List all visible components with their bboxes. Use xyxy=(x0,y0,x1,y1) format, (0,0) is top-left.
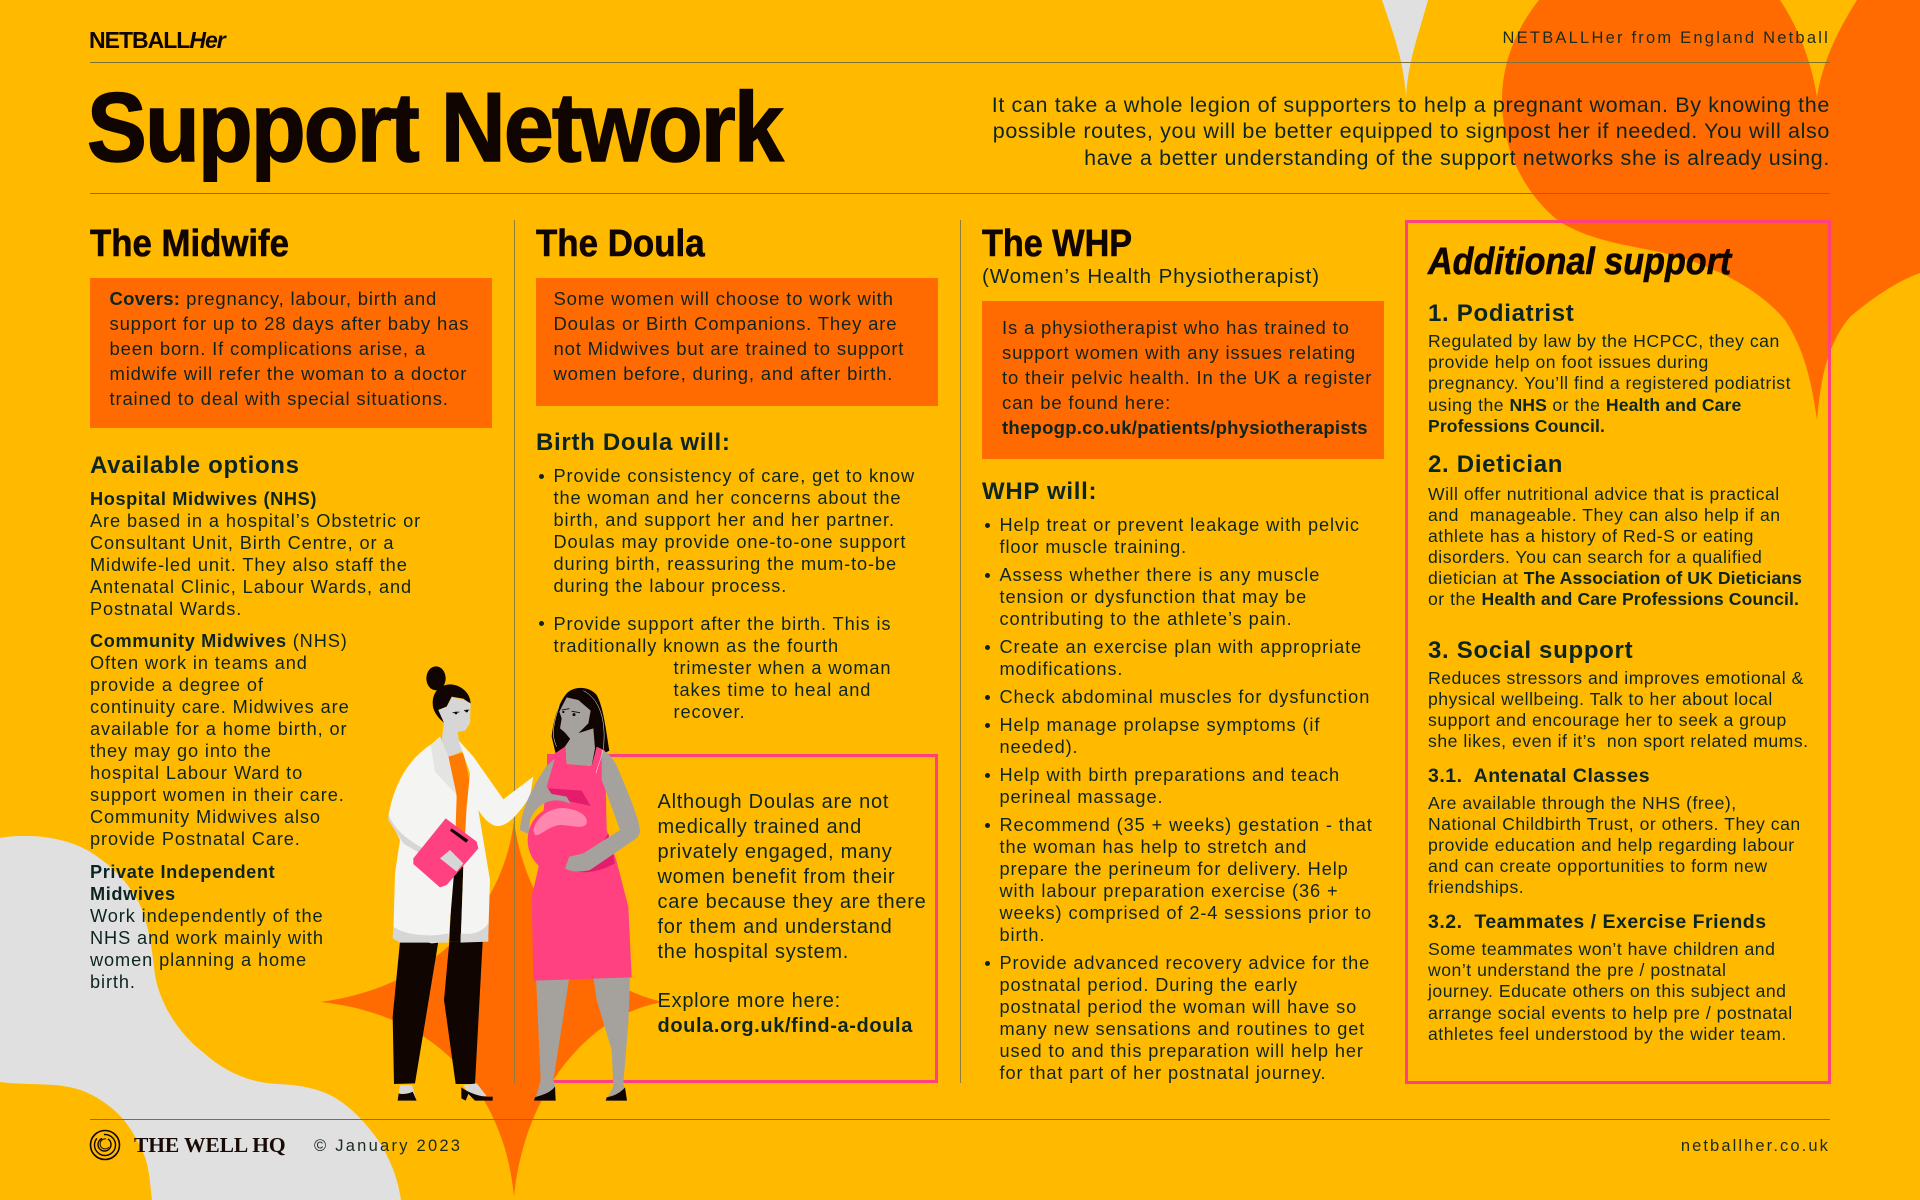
doula callout text: Although Doulas are not xyxy=(658,790,889,812)
WHP bullet list: for that part of her postnatal journey. xyxy=(1000,1063,1326,1083)
heading: the midwife: The Midwife xyxy=(90,223,289,265)
WHP summary text: thepogp.co.uk/patients/physiotherapists xyxy=(1002,416,1368,438)
private independent midwives: Work independently of the xyxy=(90,906,323,926)
podiatrist xyxy=(1428,300,1791,436)
WHP bullet list: postnatal period. During the early xyxy=(1000,975,1298,995)
title: Support Network xyxy=(87,72,782,182)
doula bullet list: traditionally known as the fourth xyxy=(554,636,839,656)
WHP bullet list: with labour preparation exercise (36 + xyxy=(1000,881,1339,901)
antenatal classes heading: 3.1. Antenatal Classes xyxy=(1428,765,1650,787)
heading: the doula: The Doula xyxy=(536,223,705,265)
WHP bullet list: birth. xyxy=(1000,925,1045,945)
WHP bullet list: prepare the perineum for delivery. Help xyxy=(1000,859,1349,879)
hospital midwives: Postnatal Wards. xyxy=(90,598,242,618)
figure: pregnant woman xyxy=(520,688,640,1101)
footer date: © January 2023 xyxy=(314,1137,462,1155)
social support text: support and encourage her to seek a group xyxy=(1428,710,1787,730)
private independent midwives: Private Independent xyxy=(90,862,275,882)
doula bullet list: birth, and support her and her partner. xyxy=(554,510,895,530)
figure: midwife xyxy=(388,666,533,1101)
midwife summary text xyxy=(110,288,469,409)
dietician text: Will offer nutritional advice that is practical xyxy=(1428,484,1780,504)
teammates text: won’t understand the pre / postnatal xyxy=(1428,960,1726,980)
hospital midwives: Consultant Unit, Birth Centre, or a xyxy=(90,532,394,552)
teammates text: Some teammates won’t have children and xyxy=(1428,939,1775,959)
doula summary text: Doulas or Birth Companions. They are xyxy=(554,312,897,334)
dietician text xyxy=(1428,484,1802,609)
doula bullet list: the woman and her concerns about the xyxy=(554,488,901,508)
antenatal classes xyxy=(1428,765,1801,897)
doula callout text: women benefit from their xyxy=(658,866,895,888)
doula callout box xyxy=(547,754,938,1083)
WHP summary text: support women with any issues relating xyxy=(1002,342,1356,362)
WHP bullet list: Help with birth preparations and teach xyxy=(1000,765,1340,785)
midwife summary text: midwife will refer the woman to a doctor xyxy=(110,362,467,384)
doula bullet list: Doulas may provide one-to-one support xyxy=(554,532,906,552)
panel: additional support xyxy=(1405,220,1831,1084)
private independent midwives: Midwives xyxy=(90,884,176,904)
podiatrist text xyxy=(1428,331,1791,436)
podiatrist text: Professions Council. xyxy=(1428,416,1605,436)
doula summary text: not Midwives but are trained to support xyxy=(554,338,904,358)
header tagline: NETBALLHer from England Netball xyxy=(1503,29,1830,47)
heading: the WHP: The WHP xyxy=(982,223,1132,265)
WHP summary text: Is a physiotherapist who has trained to xyxy=(1002,316,1350,338)
WHP bullet list: contributing to the athlete’s pain. xyxy=(1000,609,1293,629)
available options heading: Available options xyxy=(90,452,300,479)
wordmark: THE WELL HQ xyxy=(134,1133,285,1157)
podiatrist text: provide help on foot issues during xyxy=(1428,352,1709,372)
WHP bullet list: Help treat or prevent leakage with pelvic xyxy=(1000,515,1360,535)
doula callout text: for them and understand xyxy=(658,916,892,938)
doula summary text: Some women will choose to work with xyxy=(554,288,894,308)
community midwives: available for a home birth, or xyxy=(90,718,348,738)
WHP bullet list: Create an exercise plan with appropriate xyxy=(1000,637,1362,657)
panel: the WHP xyxy=(982,223,1384,1083)
doula callout text: doula.org.uk/find-a-doula xyxy=(658,1015,913,1037)
podiatrist text: Regulated by law by the HCPCC, they can xyxy=(1428,331,1780,351)
antenatal classes text xyxy=(1428,793,1801,897)
header logo: NETBALLHer xyxy=(89,27,225,53)
social support xyxy=(1428,637,1809,751)
illustration: midwife and pregnant woman xyxy=(388,666,640,1101)
antenatal classes text: friendships. xyxy=(1428,877,1524,897)
antenatal classes text: provide education and help regarding labour xyxy=(1428,835,1795,855)
doula bullet list: Provide support after the birth. This is xyxy=(554,614,891,634)
WHP bullet list: Help manage prolapse symptoms (if xyxy=(1000,715,1320,735)
WHP bullet list: floor muscle training. xyxy=(1000,537,1187,557)
WHP will heading: WHP will: xyxy=(982,478,1097,505)
WHP bullet list: tension or dysfunction that may be xyxy=(1000,587,1307,607)
WHP bullet list: used to and this preparation will help her xyxy=(1000,1041,1364,1061)
doula summary text: women before, during, and after birth. xyxy=(554,362,893,384)
social support text: she likes, even if it’s non sport related mums. xyxy=(1428,731,1809,751)
social support text xyxy=(1428,668,1809,751)
panel: the midwife xyxy=(90,223,492,992)
dietician text: athlete has a history of Red-S or eating xyxy=(1428,526,1754,546)
WHP bullet list: perineal massage. xyxy=(1000,787,1163,807)
dietician text: or the Health and Care Professions Council. xyxy=(1428,589,1799,609)
podiatrist text: using the NHS or the Health and Care xyxy=(1428,395,1741,415)
doula callout text: Explore more here: xyxy=(658,990,841,1012)
community midwives: provide a degree of xyxy=(90,674,264,694)
WHP bullet list: the woman has help to stretch and xyxy=(1000,837,1307,857)
WHP bullet list xyxy=(985,515,1373,1083)
doula callout text: care because they are there xyxy=(658,891,927,913)
WHP bullet list: many new sensations and routines to get xyxy=(1000,1019,1365,1039)
community midwives: provide Postnatal Care. xyxy=(90,828,301,848)
panel: the doula xyxy=(536,223,938,1083)
private independent midwives xyxy=(90,862,324,992)
community midwives: hospital Labour Ward to xyxy=(90,762,303,782)
midwife summary text: trained to deal with special situations. xyxy=(110,388,449,408)
WHP bullet list: needed). xyxy=(1000,737,1078,757)
private independent midwives: NHS and work mainly with xyxy=(90,928,324,948)
WHP summary box xyxy=(982,301,1384,459)
doula summary box xyxy=(536,278,938,406)
WHP bullet list: Recommend (35 + weeks) gestation - that xyxy=(1000,815,1373,835)
doula bullet list: trimester when a woman xyxy=(674,658,891,678)
community midwives: Community Midwives also xyxy=(90,806,321,826)
teammates xyxy=(1428,911,1793,1044)
community midwives: Often work in teams and xyxy=(90,652,308,672)
antenatal classes text: Are available through the NHS (free), xyxy=(1428,793,1737,813)
hospital midwives: Hospital Midwives (NHS) xyxy=(90,488,317,508)
doula bullet list xyxy=(539,466,915,722)
podiatrist heading: 1. Podiatrist xyxy=(1428,300,1574,327)
hospital midwives xyxy=(90,488,421,618)
teammates text: journey. Educate others on this subject and xyxy=(1428,981,1786,1001)
heading: additional support: Additional support xyxy=(1428,241,1731,283)
WHP bullet list: postnatal period the woman will have so xyxy=(1000,997,1357,1017)
dietician text: and manageable. They can also help if an xyxy=(1428,505,1781,525)
community midwives: Community Midwives (NHS) xyxy=(90,630,348,650)
birth doula will heading: Birth Doula will: xyxy=(536,429,731,456)
WHP summary text: to their pelvic health. In the UK a register xyxy=(1002,366,1372,388)
doula callout text xyxy=(658,790,927,1037)
social support heading: 3. Social support xyxy=(1428,637,1633,664)
hospital midwives: Antenatal Clinic, Labour Wards, and xyxy=(90,576,412,596)
private independent midwives: birth. xyxy=(90,972,136,992)
doula callout text: medically trained and xyxy=(658,816,862,838)
doula bullet list: during birth, reassuring the mum-to-be xyxy=(554,554,897,574)
teammates text: athletes feel understood by the wider team. xyxy=(1428,1024,1787,1044)
intro text: have a better understanding of the support networks she is already using. xyxy=(1084,146,1830,170)
midwife summary text: been born. If complications arise, a xyxy=(110,338,426,358)
teammates text: arrange social events to help pre / postnatal xyxy=(1428,1003,1793,1023)
teammates heading: 3.2. Teammates / Exercise Friends xyxy=(1428,911,1767,933)
doula bullet list: recover. xyxy=(674,702,745,722)
dietician heading: 2. Dietician xyxy=(1428,451,1563,478)
icon: spiral xyxy=(90,1130,120,1160)
antenatal classes text: National Childbirth Trust, or others. They can xyxy=(1428,814,1801,834)
intro text: possible routes, you will be better equipped to signpost her if needed. You will also xyxy=(993,119,1830,143)
WHP bullet list: Provide advanced recovery advice for the xyxy=(1000,953,1370,973)
social support text: physical wellbeing. Talk to her about local xyxy=(1428,689,1773,709)
doula summary text xyxy=(554,288,904,384)
community midwives xyxy=(90,630,350,849)
WHP bullet list: Check abdominal muscles for dysfunction xyxy=(1000,687,1370,707)
footer logo: the well HQ xyxy=(90,1130,285,1160)
doula callout text: the hospital system. xyxy=(658,941,849,963)
WHP bullet list: weeks) comprised of 2-4 sessions prior to xyxy=(1000,903,1372,923)
dietician text: dietician at The Association of UK Dieticians xyxy=(1428,568,1802,588)
WHP bullet list: modifications. xyxy=(1000,659,1123,679)
hospital midwives: Midwife-led unit. They also staff the xyxy=(90,554,408,574)
community midwives: continuity care. Midwives are xyxy=(90,696,350,716)
doula bullet list: Provide consistency of care, get to know xyxy=(554,466,915,486)
antenatal classes text: and can create opportunities to form new xyxy=(1428,856,1768,876)
dietician xyxy=(1428,451,1802,609)
midwife summary text: Covers: pregnancy, labour, birth and xyxy=(110,288,437,308)
podiatrist text: pregnancy. You’ll find a registered podiatrist xyxy=(1428,373,1791,393)
doula bullet list: during the labour process. xyxy=(554,576,787,596)
doula callout text: privately engaged, many xyxy=(658,841,892,863)
intro text: It can take a whole legion of supporters to help a pregnant woman. By knowing the xyxy=(992,93,1830,117)
WHP summary text: can be found here: xyxy=(1002,392,1171,412)
WHP bullet list: Assess whether there is any muscle xyxy=(1000,565,1320,585)
intro text xyxy=(992,93,1830,170)
doula bullet list: takes time to heal and xyxy=(674,680,871,700)
teammates text xyxy=(1428,939,1793,1044)
community midwives: support women in their care. xyxy=(90,784,345,804)
midwife summary box xyxy=(90,278,492,428)
community midwives: they may go into the xyxy=(90,740,272,760)
midwife summary text: support for up to 28 days after baby has xyxy=(110,312,469,334)
WHP summary text xyxy=(1002,316,1372,438)
social support text: Reduces stressors and improves emotional & xyxy=(1428,668,1804,688)
hospital midwives: Are based in a hospital’s Obstetric or xyxy=(90,510,421,530)
WHP subheading: (Women’s Health Physiotherapist) xyxy=(982,265,1320,288)
footer url: netballher.co.uk xyxy=(1681,1137,1830,1155)
dietician text: disorders. You can search for a qualified xyxy=(1428,547,1762,567)
private independent midwives: women planning a home xyxy=(90,950,307,970)
